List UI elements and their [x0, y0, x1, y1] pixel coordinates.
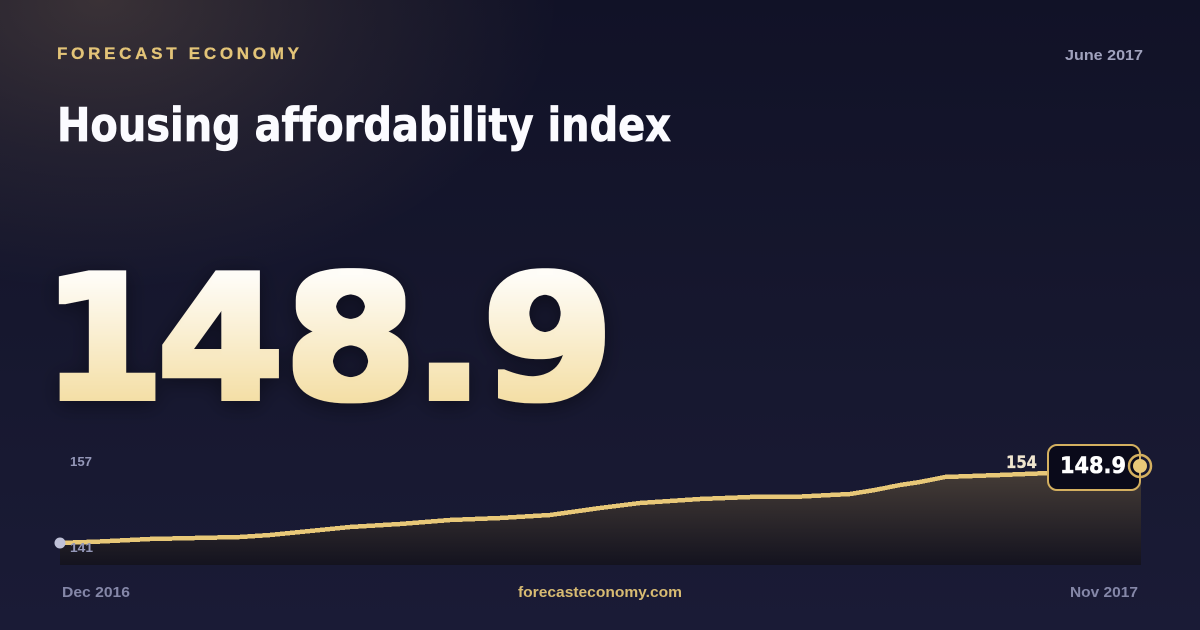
headline number: 1: [42, 239, 165, 438]
headline number: 4: [157, 240, 284, 439]
current point marker: [1129, 455, 1151, 477]
eyebrow: brand name: FORECAST ECONOMY: [57, 44, 300, 63]
chart area fill: [60, 466, 1141, 565]
source url: forecasteconomy.com: [518, 585, 682, 601]
current value callout: 148.9: [1060, 454, 1126, 479]
start point marker: [54, 538, 66, 548]
x-axis start label: Dec 2016: [62, 584, 130, 601]
title: Housing affordability index: [57, 98, 671, 152]
axis label: min: 141: [70, 540, 93, 555]
headline number: 9: [482, 239, 614, 439]
peak value label: 154: [1006, 453, 1037, 472]
headline number: 8: [284, 239, 417, 439]
headline number: .: [412, 240, 486, 439]
chart line: [60, 473, 1050, 543]
headline number: [42, 239, 614, 439]
area chart: [54, 466, 1141, 565]
date label: June 2017: [1065, 47, 1143, 64]
current value callout: [1048, 445, 1140, 490]
x-axis end label: Nov 2017: [1070, 584, 1138, 601]
axis label: max: 157: [70, 454, 92, 469]
